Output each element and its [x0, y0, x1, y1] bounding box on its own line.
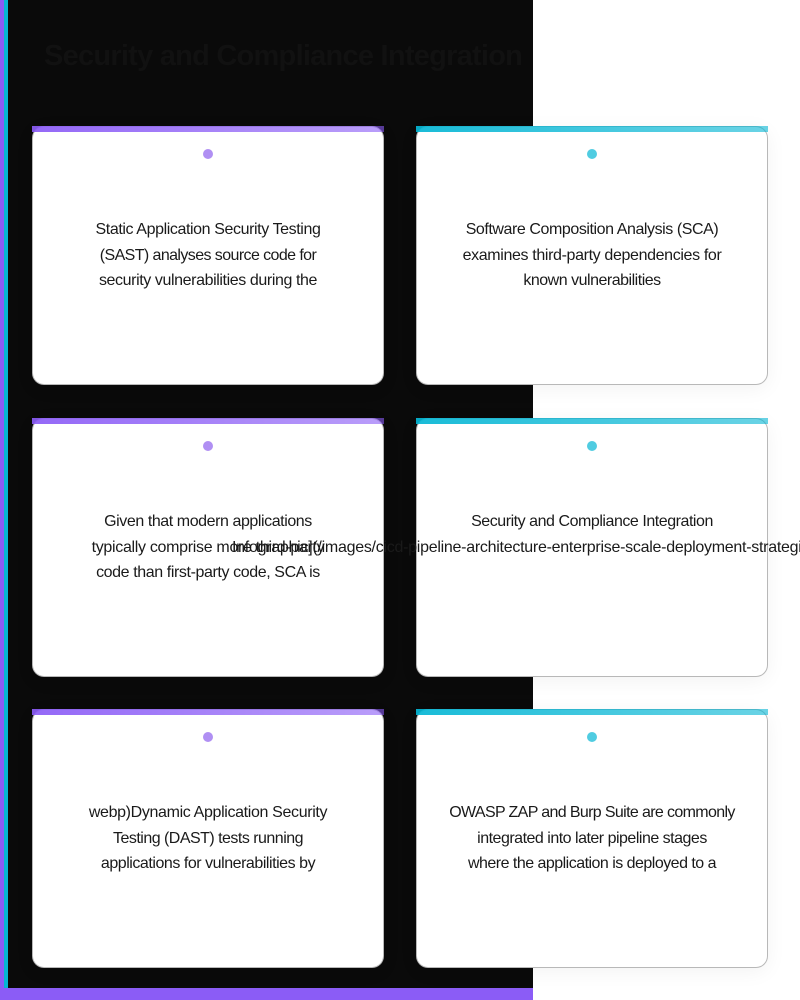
text line 3: known vulnerabilities — [523, 272, 661, 289]
card top bar: purple — [32, 418, 384, 424]
panel: section infographic reference — [416, 418, 768, 676]
text line 3: applications for vulnerabilities by — [101, 855, 315, 872]
left cyan accent bar — [4, 0, 8, 988]
bottom purple accent bar — [0, 988, 533, 1000]
dot marker: cyan — [587, 440, 597, 450]
panel: OWASP ZAP and Burp Suite — [416, 709, 768, 968]
text line 2: (SAST) analyses source code for — [100, 247, 316, 264]
text line 1: Static Application Security Testing — [96, 221, 320, 238]
card top bar: cyan — [416, 709, 768, 715]
text line 2: examines third-party dependencies for — [463, 247, 721, 264]
text line 1: webp)Dynamic Application Security — [89, 804, 327, 821]
text line 3: where the application is deployed to a — [468, 855, 716, 872]
card top bar: cyan — [416, 418, 768, 424]
text line 1: Given that modern applications — [104, 512, 312, 530]
dot marker: purple — [203, 732, 213, 742]
left purple accent bar — [0, 0, 4, 1000]
card top bar: purple — [32, 709, 384, 715]
text line 1: Security and Compliance Integration — [471, 512, 713, 530]
text line 3: code than first-party code, SCA is — [96, 564, 320, 580]
panel: SAST — [32, 126, 384, 385]
dot marker: cyan — [587, 149, 597, 159]
text line 3: security vulnerabilities during the — [99, 272, 317, 289]
title: Security and Compliance Integration — [44, 40, 522, 72]
text line 2: integrated into later pipeline stages — [477, 830, 707, 847]
dark background panel — [0, 0, 533, 988]
card top bar: cyan — [416, 126, 768, 132]
panel: SCA — [416, 126, 768, 385]
dot marker: cyan — [587, 732, 597, 742]
text line 1: OWASP ZAP and Burp Suite are commonly — [449, 804, 735, 821]
card top bar: purple — [32, 126, 384, 132]
text line 2: typically comprise more third-party — [92, 538, 324, 556]
dot marker: purple — [203, 149, 213, 159]
dot marker: purple — [203, 440, 213, 450]
text line 1: Software Composition Analysis (SCA) — [466, 221, 718, 238]
overflowing image path text: Infographic](/images/cicd-pipeline-architecture-enterprise-scale-deployment-strategi — [232, 538, 800, 556]
panel: DAST — [32, 709, 384, 968]
panel: third-party code — [32, 418, 384, 676]
text line 2: Testing (DAST) tests running — [113, 830, 303, 847]
